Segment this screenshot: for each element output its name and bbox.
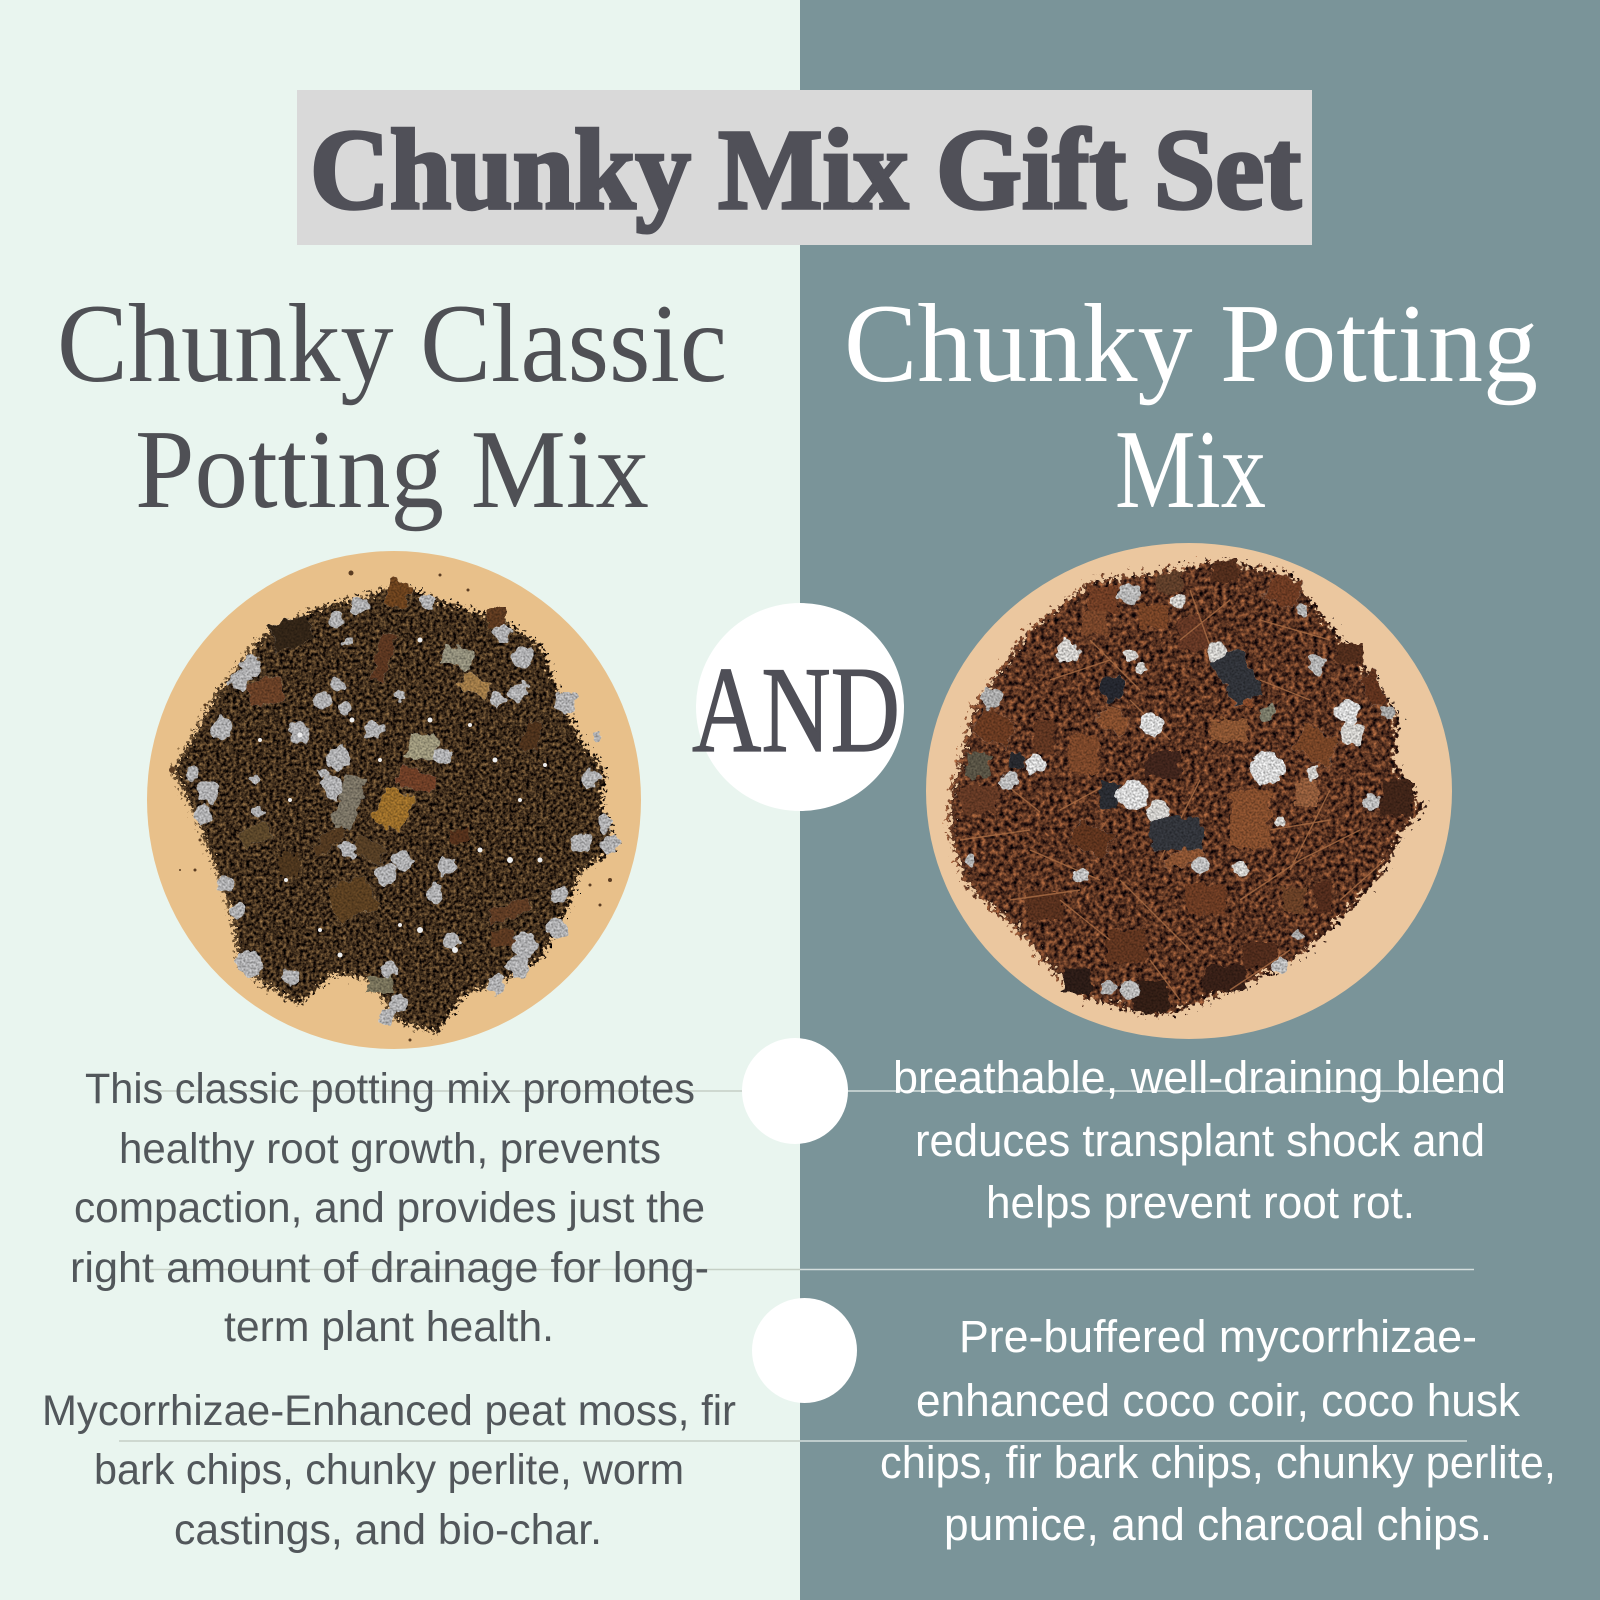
title: Chunky Mix Gift Set <box>310 106 1301 233</box>
text block: classic mix ingredients <box>42 1387 736 1554</box>
text block: potting mix ingredients <box>880 1311 1556 1550</box>
text block: classic mix benefits: right amount of drainage for long- <box>70 1244 709 1292</box>
heading: Chunky Classic Potting Mix <box>57 282 727 532</box>
text block: classic mix ingredients: bark chips, chunky perlite, worm <box>94 1446 684 1494</box>
text block: classic mix benefits: term plant health. <box>224 1303 554 1351</box>
image: chunky potting mix on wooden plate <box>926 543 1452 1039</box>
text block: classic mix benefits: healthy root growth, prevents <box>119 1125 661 1173</box>
heading: Chunky Classic Potting Mix: Potting Mix <box>135 408 649 532</box>
text block: classic mix ingredients: castings, and bio-char. <box>174 1506 602 1554</box>
panel: right teal background <box>800 0 1600 1600</box>
text block: potting mix ingredients: chips, fir bark chips, chunky perlite, <box>880 1437 1556 1488</box>
decorative circle upper <box>742 1038 848 1144</box>
text block: classic mix benefits: compaction, and provides just the <box>74 1184 705 1232</box>
heading: Chunky Potting Mix: Chunky Potting <box>844 282 1538 406</box>
heading: Chunky Potting Mix <box>844 282 1538 532</box>
text block: classic mix ingredients: Mycorrhizae-Enhanced peat moss, fir <box>42 1387 736 1435</box>
decorative circle lower <box>752 1298 857 1403</box>
circle badge: AND <box>692 603 904 811</box>
text block: potting mix benefits <box>893 1052 1506 1228</box>
text block: potting mix ingredients: Pre-buffered mycorrhizae- <box>959 1311 1477 1362</box>
text block: classic mix benefits <box>70 1065 709 1351</box>
panel: left mint background <box>0 0 800 1600</box>
text block: classic mix benefits: This classic potting mix promotes <box>85 1065 695 1113</box>
text block: potting mix ingredients: pumice, and charcoal chips. <box>944 1499 1492 1550</box>
text block: potting mix ingredients: enhanced coco coir, coco husk <box>916 1375 1520 1426</box>
circle badge: AND: AND <box>692 641 900 778</box>
text block: potting mix benefits: reduces transplant shock and <box>915 1115 1485 1166</box>
text block: potting mix benefits: helps prevent root rot. <box>986 1177 1415 1228</box>
heading: Chunky Classic Potting Mix: Chunky Classic <box>57 282 727 406</box>
connector lines <box>119 1091 1474 1441</box>
image: classic potting mix on wooden plate <box>147 551 641 1049</box>
heading: Chunky Potting Mix: Mix <box>1115 408 1266 532</box>
text block: potting mix benefits: breathable, well-draining blend <box>893 1052 1506 1103</box>
